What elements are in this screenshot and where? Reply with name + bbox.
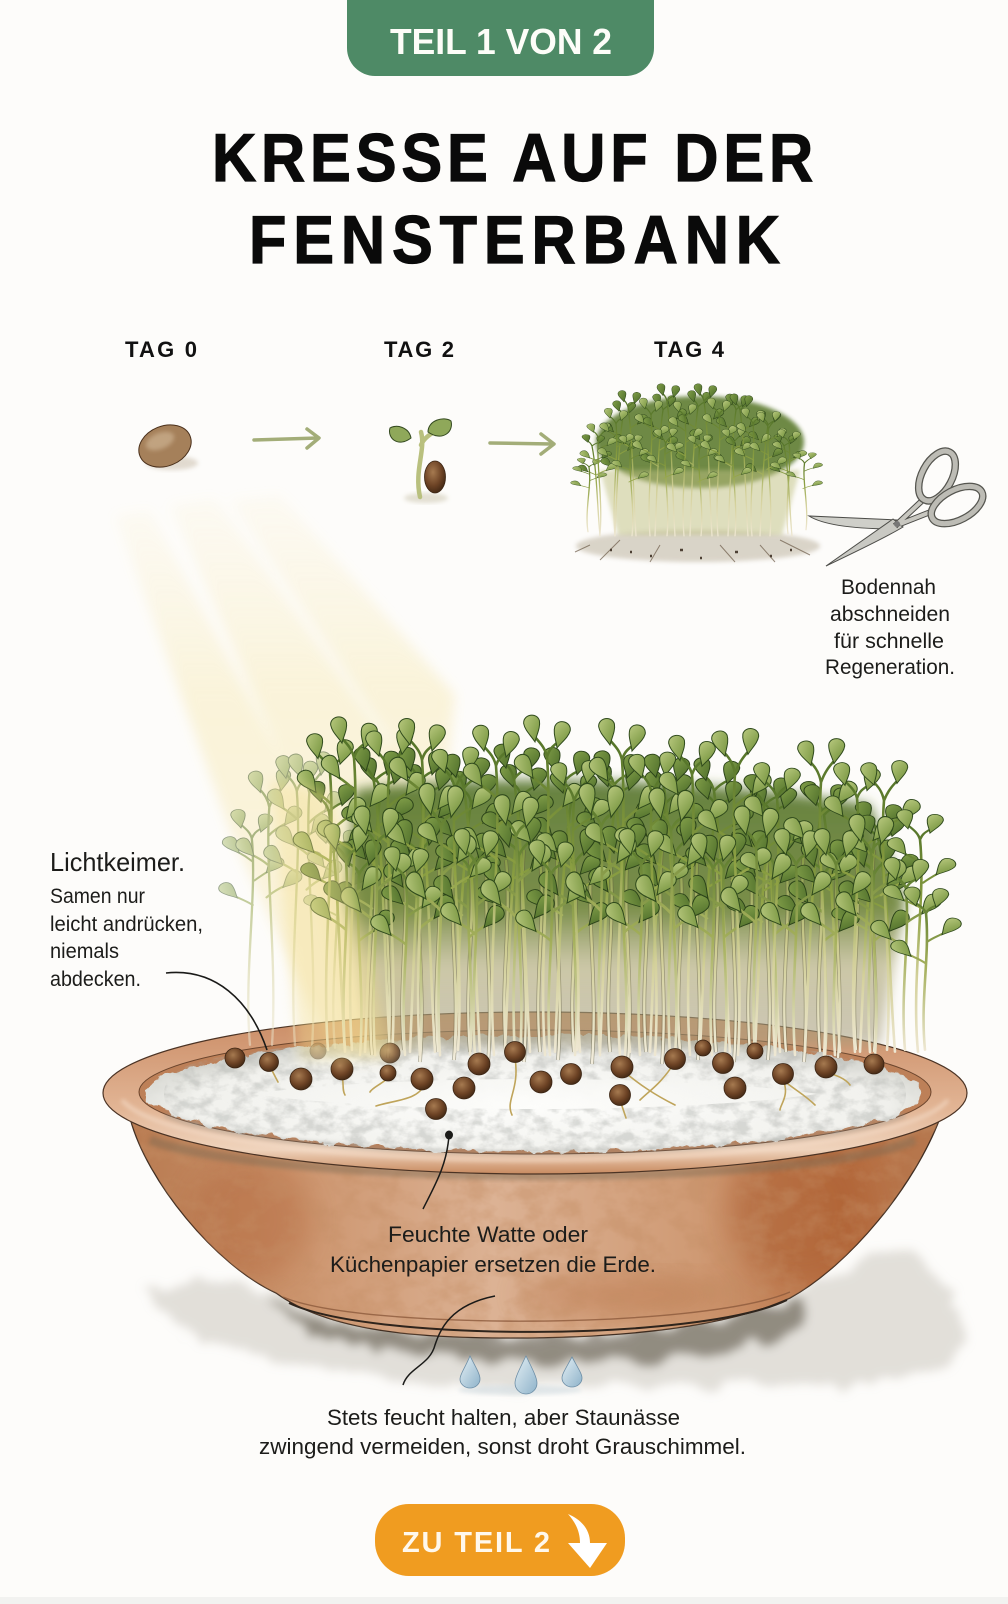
text: cutting note: Bodennah (841, 576, 936, 599)
text: cutting note: abschneiden (830, 603, 950, 626)
sun rays over sprouts (270, 780, 395, 1060)
illustration: cress clump day 4 (569, 383, 824, 562)
bowl rim (103, 1012, 967, 1174)
roots (271, 1058, 850, 1118)
illustration: terracotta bowl (103, 1012, 967, 1338)
arrow: day 2 to day 4 (490, 434, 554, 454)
label: Tag 4: TAG 4 (654, 337, 725, 362)
text: light germinator note (50, 847, 203, 991)
text: cotton note (330, 1222, 656, 1277)
icon: curved arrow (568, 1514, 607, 1568)
text: light germinator note: Lichtkeimer. (50, 847, 185, 877)
arrow: day 0 to day 2 (254, 429, 319, 448)
part badge (347, 0, 654, 76)
bowl body (130, 1118, 940, 1338)
text: moisture note: zwingend vermeiden, sonst droht Grauschimmel. (259, 1434, 746, 1459)
text: light germinator note: leicht andrücken, (50, 913, 203, 936)
arrow: to seed (166, 972, 267, 1050)
button: to part 2 (375, 1504, 625, 1576)
text: cutting note: für schnelle (834, 630, 944, 653)
part badge: TEIL 1 VON 2 (390, 21, 612, 62)
pale stems (370, 850, 876, 1064)
illustration: cress plants (271, 714, 964, 1118)
label: Tag 2: TAG 2 (384, 337, 454, 362)
illustration: shadow under bowl (150, 1250, 965, 1388)
icon: scissors (809, 445, 989, 566)
dense foliage backdrop (345, 780, 905, 1046)
title (212, 119, 813, 278)
text: light germinator note: niemals (50, 940, 119, 963)
text: cutting note: Regeneration. (825, 656, 955, 679)
text: light germinator note: abdecken. (50, 968, 141, 991)
icon: water drops (458, 1356, 582, 1395)
text: light germinator note: Samen nur (50, 885, 145, 908)
cotton layer (147, 1036, 923, 1152)
text: cotton note: Küchenpapier ersetzen die Erde. (330, 1252, 656, 1277)
text: moisture note: Stets feucht halten, aber Staunässe (327, 1405, 680, 1430)
label: Tag 0: TAG 0 (125, 337, 197, 362)
illustration: faded sprouts in the light (216, 751, 372, 1048)
arrow: cotton leader (423, 1130, 453, 1209)
title: KRESSE AUF DER (212, 119, 813, 196)
icon: seed day 0 (132, 417, 198, 475)
back sprouts (298, 743, 921, 1055)
front sprouts (290, 714, 964, 1055)
arrow: moisture leader (403, 1296, 495, 1385)
text: moisture note (259, 1405, 746, 1459)
button: to part 2: ZU TEIL 2 (402, 1527, 550, 1559)
illustration: sun rays (115, 495, 455, 1050)
seeds on cotton (225, 1040, 884, 1120)
icon: sprout day 2 (390, 419, 451, 503)
text: cutting note (825, 576, 955, 679)
text: cotton note: Feuchte Watte oder (388, 1222, 588, 1247)
title: FENSTERBANK (249, 201, 780, 278)
